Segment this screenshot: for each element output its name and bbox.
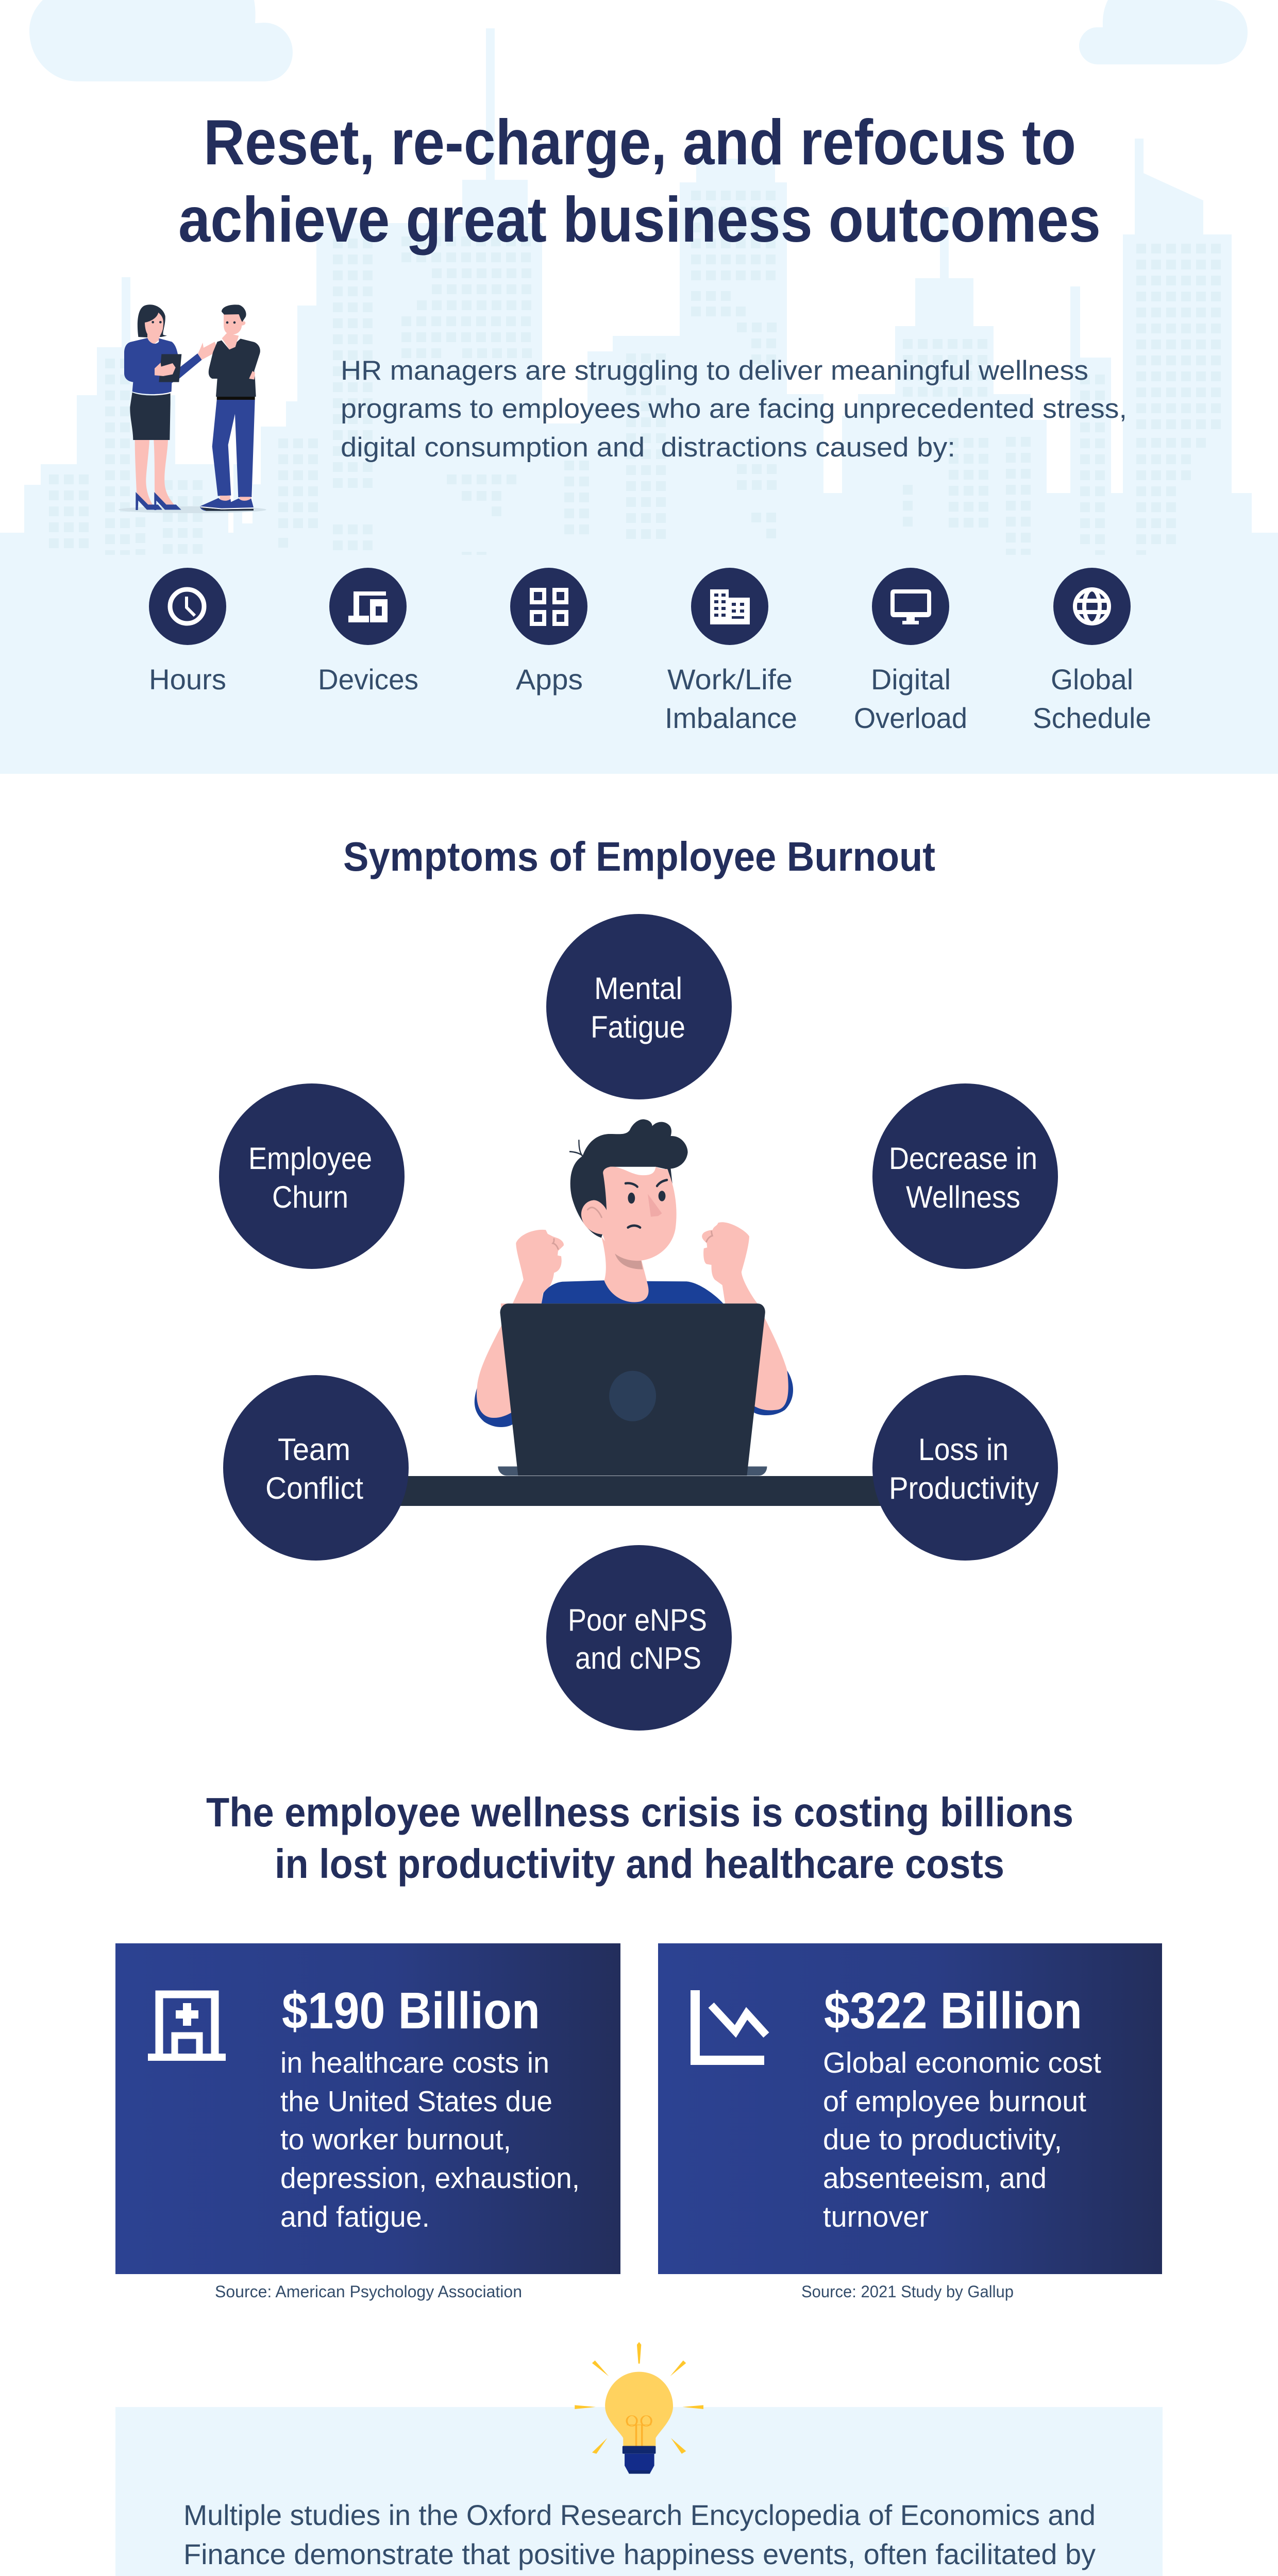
title xyxy=(178,107,1101,256)
symptom: employee churn xyxy=(219,1083,405,1269)
source notes: Source: 2021 Study by Gallup xyxy=(801,2282,1014,2301)
icon: apps xyxy=(510,568,587,645)
symptom: employee churn: Employee xyxy=(248,1141,372,1176)
icon: hospital xyxy=(148,1994,226,2061)
panel: research finding xyxy=(115,2342,1163,2576)
icon labels: Imbalance xyxy=(665,702,797,734)
symptom: loss in productivity: Productivity xyxy=(889,1471,1039,1505)
heading: wellness crisis: in lost productivity and healthcare costs xyxy=(275,1841,1004,1887)
card: $190 billion: and fatigue. xyxy=(280,2200,430,2233)
card: $190 billion: in healthcare costs in xyxy=(280,2046,549,2079)
card: $322 billion: $322 Billion xyxy=(824,1982,1082,2040)
intro text: programs to employees who are facing unprecedented stress, xyxy=(341,394,1127,424)
symptom: mental fatigue xyxy=(546,914,732,1099)
intro text: HR managers are struggling to deliver meaningful wellness xyxy=(341,355,1088,386)
icon labels: Overload xyxy=(854,702,967,734)
panel: research finding: Multiple studies in the Oxford Research Encyclopedia of Economics and xyxy=(183,2499,1096,2531)
band background xyxy=(0,533,1278,774)
icon labels: Devices xyxy=(318,663,418,696)
symptom: team conflict: Team xyxy=(278,1432,350,1467)
symptom: mental fatigue: Fatigue xyxy=(591,1010,685,1044)
title: achieve great business outcomes xyxy=(178,184,1101,256)
icon labels: Work/Life xyxy=(667,663,793,696)
card: $322 billion: absenteeism, and xyxy=(823,2162,1047,2195)
panel: research finding: Finance demonstrate that positive happiness events, often facilitated by xyxy=(183,2538,1096,2570)
card: $190 billion: the United States due xyxy=(280,2085,552,2118)
icon labels: Global xyxy=(1051,663,1133,696)
heading: symptoms: Symptoms of Employee Burnout xyxy=(343,834,935,879)
symptom: team conflict: Conflict xyxy=(265,1471,363,1505)
card: $190 billion: depression, exhaustion, xyxy=(280,2162,580,2195)
card: $322 billion xyxy=(658,1943,1162,2274)
icon: clock xyxy=(149,568,226,645)
icon labels: Schedule xyxy=(1033,702,1151,734)
icon: light bulb xyxy=(575,2342,703,2474)
icon: devices xyxy=(329,568,407,645)
card: $190 billion: $190 Billion xyxy=(282,1982,540,2040)
intro text: digital consumption and distractions caused by: xyxy=(341,432,955,463)
symptom: decrease in wellness xyxy=(872,1083,1058,1269)
symptom: loss in productivity: Loss in xyxy=(918,1432,1008,1467)
city skyline xyxy=(24,28,1252,536)
symptom: decrease in wellness: Wellness xyxy=(906,1180,1020,1214)
icon: monitor xyxy=(872,568,949,645)
card: $190 billion: to worker burnout, xyxy=(280,2123,511,2156)
cloud right xyxy=(1079,0,1248,64)
card: $322 billion: of employee burnout xyxy=(823,2085,1086,2118)
symptom: poor eNPS and cNPS: and cNPS xyxy=(575,1641,701,1675)
windows xyxy=(49,191,1221,560)
symptom: poor eNPS and cNPS xyxy=(546,1545,732,1731)
card: $190 billion xyxy=(115,1943,620,2274)
cloud left xyxy=(29,0,293,81)
icon labels: Hours xyxy=(149,663,226,696)
card: $322 billion: Global economic cost xyxy=(823,2046,1101,2079)
symptom: team conflict xyxy=(223,1375,409,1561)
table xyxy=(398,1476,882,1506)
symptom: employee churn: Churn xyxy=(272,1180,348,1214)
icon row: causes xyxy=(149,568,1131,645)
heading: wellness crisis: The employee wellness crisis is costing billions xyxy=(206,1789,1073,1835)
symptom: decrease in wellness: Decrease in xyxy=(889,1141,1037,1176)
symptom: poor eNPS and cNPS: Poor eNPS xyxy=(568,1603,707,1637)
source notes xyxy=(215,2282,1014,2301)
header background: clouds, skyline and band xyxy=(0,0,1278,774)
symptom: mental fatigue: Mental xyxy=(594,971,682,1006)
illustration: two coworkers talking xyxy=(119,304,266,513)
illustration: stressed man at laptop xyxy=(475,1119,793,1476)
icon: building xyxy=(691,568,768,645)
icon labels xyxy=(149,663,1151,734)
source notes: Source: American Psychology Association xyxy=(215,2282,522,2301)
symptom: loss in productivity xyxy=(872,1375,1058,1561)
card: $322 billion: due to productivity, xyxy=(823,2123,1062,2156)
title: Reset, re-charge, and refocus to xyxy=(204,107,1076,178)
card: $322 billion: turnover xyxy=(823,2200,929,2233)
icon: globe xyxy=(1053,568,1131,645)
intro text xyxy=(341,355,1127,463)
icon labels: Digital xyxy=(871,663,951,696)
icon labels: Apps xyxy=(516,663,583,696)
heading: wellness crisis xyxy=(206,1789,1073,1887)
icon: falling chart xyxy=(695,1990,766,2060)
